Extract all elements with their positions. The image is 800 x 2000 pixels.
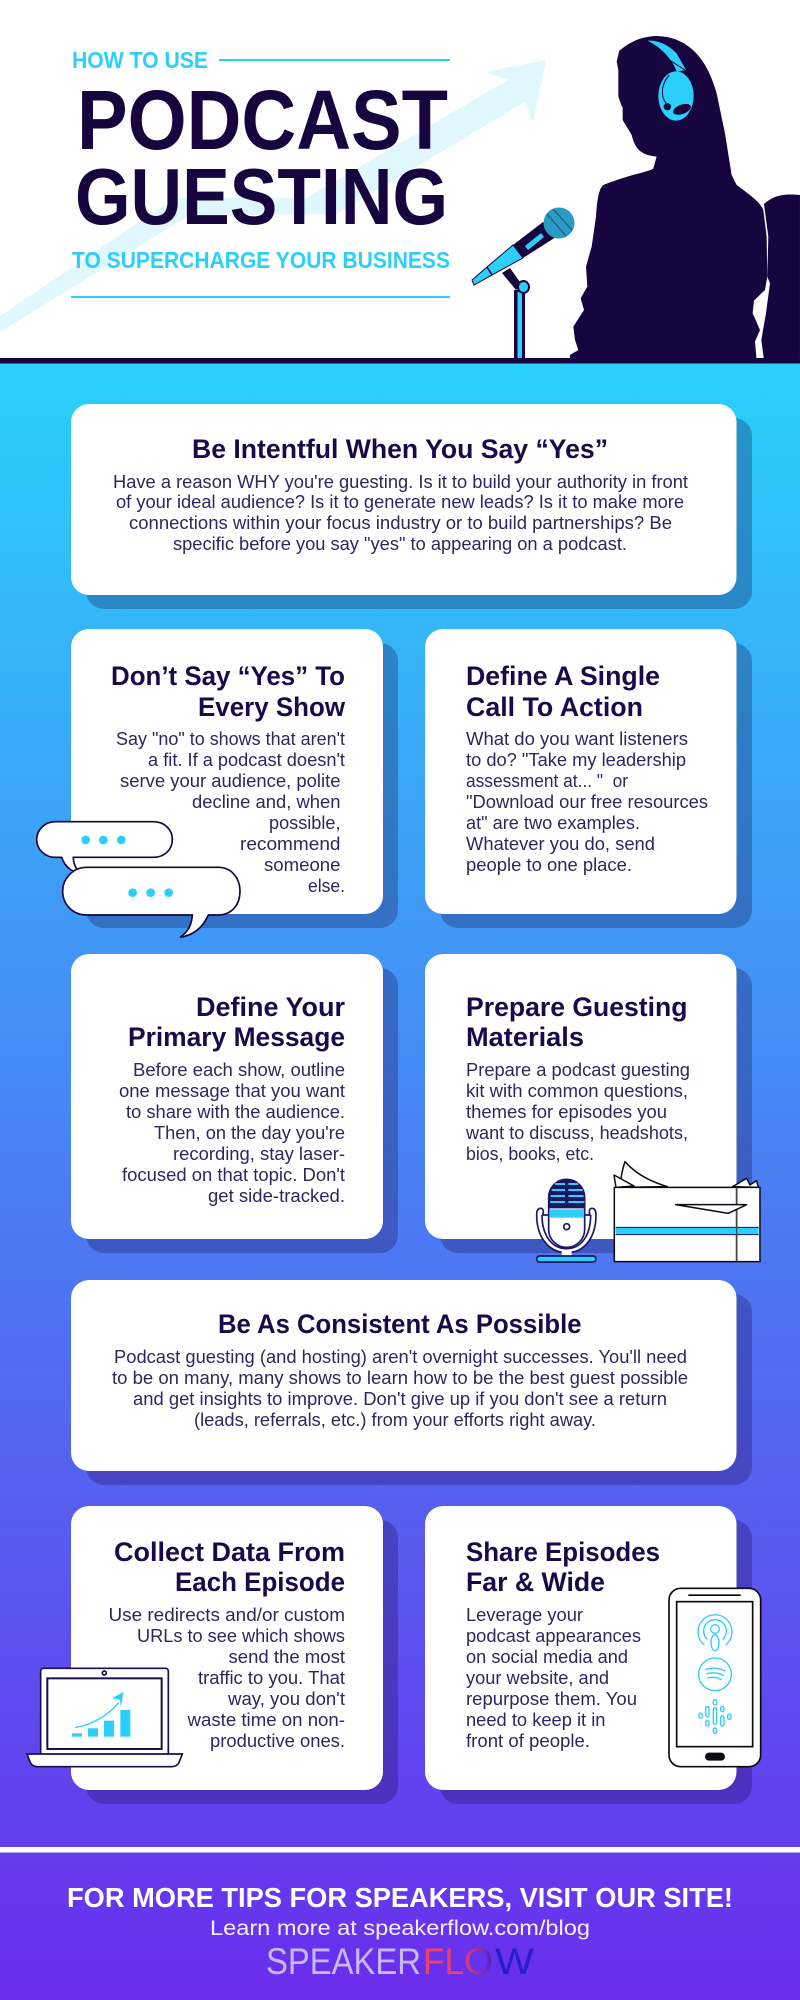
heading: Primary Message	[128, 1022, 345, 1052]
body text: need to keep it in	[466, 1710, 606, 1730]
heading: Share Episodes	[466, 1537, 660, 1567]
heading	[466, 1537, 660, 1597]
body text	[466, 1605, 641, 1751]
body text	[112, 1347, 688, 1430]
body text: Prepare a podcast guesting	[466, 1060, 690, 1080]
icon: google podcasts	[699, 1700, 731, 1733]
panel: share episodes	[425, 1506, 761, 1804]
icon: studio microphone	[537, 1179, 596, 1262]
body text: What do you want listeners	[466, 729, 688, 749]
pale growth arrow	[0, 60, 546, 332]
subtitle: TO SUPERCHARGE YOUR BUSINESS	[72, 247, 450, 273]
icon: speech bubbles	[37, 822, 240, 937]
body text: Use redirects and/or custom	[108, 1605, 345, 1625]
body text: assessment at... " or	[466, 771, 628, 791]
body text: repurpose them. You	[466, 1689, 637, 1709]
body text: and get insights to improve. Don't give up if you don't see a return	[133, 1389, 667, 1409]
body text	[466, 729, 708, 875]
panel: be intentful	[71, 404, 752, 609]
heading: Prepare Guesting	[466, 992, 688, 1022]
body text: at" are two examples.	[466, 813, 640, 833]
heading: Materials	[466, 1022, 584, 1052]
body text: on social media and	[466, 1647, 628, 1667]
body text: decline and, when	[192, 792, 340, 812]
logo: speakerflow: SPEAKER	[266, 1941, 421, 1982]
panel: collect data	[27, 1506, 398, 1804]
logo: speakerflow: FL	[423, 1941, 464, 1982]
body text: themes for episodes you	[466, 1102, 667, 1122]
body text: someone	[264, 855, 340, 875]
heading: Call To Action	[466, 692, 643, 722]
body text: to be on many, many shows to learn how to be the best guest possible	[112, 1368, 688, 1388]
logo: speakerflow: O	[464, 1941, 493, 1982]
body text	[113, 472, 688, 554]
body text: get side-tracked.	[208, 1186, 345, 1206]
body text: your website, and	[466, 1668, 609, 1688]
main silhouette	[570, 36, 767, 360]
body text: productive ones.	[210, 1731, 345, 1751]
body text: possible,	[269, 813, 340, 833]
body text: podcast appearances	[466, 1626, 641, 1646]
body text: front of people.	[466, 1731, 590, 1751]
body text: serve your audience, polite	[120, 771, 340, 791]
body text: focused on that topic. Don't	[122, 1165, 345, 1185]
title: podcast guesting: GUESTING	[75, 152, 448, 241]
body text: a fit. If a podcast doesn't	[148, 750, 345, 770]
body text: recommend	[240, 834, 340, 854]
body text: way, you don't	[227, 1689, 345, 1709]
illustration: woman silhouette with headphones	[570, 36, 800, 360]
logo: speakerflow: W	[495, 1941, 534, 1982]
body text: Leverage your	[466, 1605, 583, 1625]
logo: speakerflow	[266, 1941, 534, 1982]
footer headline: FOR MORE TIPS FOR SPEAKERS, VISIT OUR SITE!	[67, 1882, 733, 1913]
body text: of your ideal audience? Is it to generate new leads? Is it to make more	[116, 492, 684, 512]
icon: spotify	[699, 1658, 731, 1691]
body text: Podcast guesting (and hosting) aren't overnight successes. You'll need	[114, 1347, 687, 1367]
body text: people to one place.	[466, 855, 632, 875]
heading	[466, 661, 660, 722]
second person silhouette	[761, 195, 800, 360]
body text: to do? "Take my leadership	[466, 750, 686, 770]
panel: guesting materials	[425, 954, 760, 1262]
footer	[0, 1847, 800, 1982]
body text: Have a reason WHY you're guesting. Is it to build your authority in front	[113, 472, 688, 492]
footer link text: Learn more at speakerflow.com/blog	[210, 1917, 590, 1940]
body text	[465, 1060, 690, 1164]
panel: single call to action	[425, 629, 752, 928]
desk bar	[0, 358, 800, 364]
heading: Every Show	[198, 692, 346, 722]
heading: Be As Consistent As Possible	[218, 1309, 582, 1339]
body text: to share with the audience.	[126, 1102, 345, 1122]
heading: Don’t Say “Yes” To	[111, 661, 345, 691]
body text: recording, stay laser-	[173, 1144, 345, 1164]
heading	[466, 992, 688, 1052]
header	[0, 36, 800, 363]
body text: Then, on the day you're	[154, 1123, 345, 1143]
heading	[114, 1537, 345, 1597]
heading	[128, 992, 345, 1052]
heading: Be Intentful When You Say “Yes”	[192, 434, 608, 464]
body text	[108, 1605, 345, 1751]
icon: microphone on stand	[472, 208, 574, 358]
heading	[111, 661, 346, 722]
body text: else.	[308, 876, 345, 896]
body text: send the most	[228, 1647, 345, 1667]
icon: apple podcasts	[698, 1615, 732, 1651]
body text: Say "no" to shows that aren't	[116, 729, 345, 749]
heading: Define A Single	[466, 661, 660, 691]
body text: one message that you want	[119, 1081, 345, 1101]
body text: URLs to see which shows	[137, 1626, 345, 1646]
body text	[119, 1060, 345, 1206]
body text: specific before you say "yes" to appearing on a podcast.	[173, 534, 627, 554]
icon: laptop with growth chart	[27, 1668, 182, 1767]
body text: Whatever you do, send	[466, 834, 655, 854]
heading: Collect Data From	[114, 1537, 345, 1567]
heading: Define Your	[196, 992, 345, 1022]
body text: Before each show, outline	[133, 1060, 345, 1080]
panel: primary message	[71, 954, 398, 1253]
body text: "Download our free resources	[466, 792, 708, 812]
panel: be consistent	[71, 1280, 752, 1485]
eyebrow: how to use: HOW TO USE	[72, 47, 208, 73]
body text: kit with common questions,	[466, 1081, 688, 1101]
body text: want to discuss, headshots,	[465, 1123, 688, 1143]
icon: guest kit folder	[614, 1162, 760, 1262]
body text: waste time on non-	[186, 1710, 345, 1730]
body text: (leads, referrals, etc.) from your efforts right away.	[194, 1410, 596, 1430]
body text: traffic to you. That	[198, 1668, 345, 1688]
panel: don't say yes	[37, 629, 398, 937]
body text	[116, 729, 345, 896]
title: podcast guesting: PODCAST	[77, 73, 448, 167]
heading: Far & Wide	[466, 1567, 605, 1597]
body text: connections within your focus industry or to build partnerships? Be	[129, 513, 672, 533]
title: podcast guesting	[75, 73, 448, 241]
body text: bios, books, etc.	[466, 1144, 594, 1164]
icon: phone with podcast apps	[669, 1588, 761, 1767]
headphones	[647, 41, 694, 121]
heading: Each Episode	[175, 1567, 345, 1597]
